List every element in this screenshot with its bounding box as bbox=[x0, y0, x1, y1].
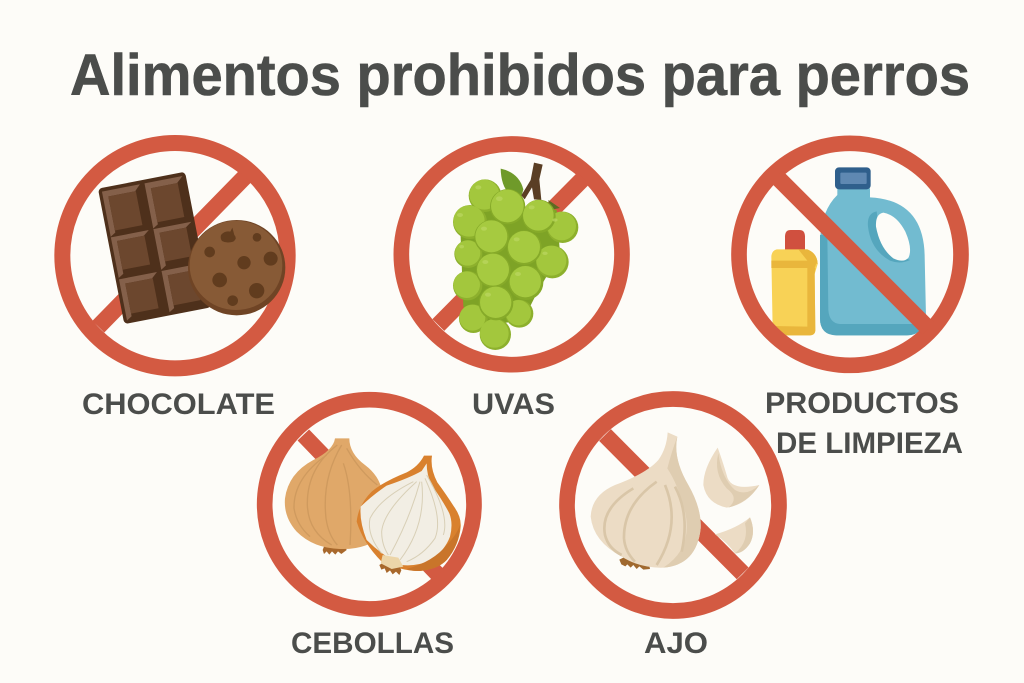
label: ajo: AJO bbox=[644, 627, 708, 660]
icon: grape leaf and stem bbox=[501, 163, 560, 210]
prohibition sign: productos de limpieza bbox=[739, 143, 961, 365]
icon: blue jug bbox=[820, 167, 926, 335]
panel: uvas bbox=[401, 144, 622, 365]
icon: cookie bbox=[188, 220, 285, 315]
prohibition sign: uvas bbox=[401, 144, 622, 365]
title: Alimentos prohibidos para perros bbox=[70, 43, 970, 108]
icon: garlic clove large bbox=[703, 448, 759, 508]
panel: ajo bbox=[567, 399, 779, 611]
prohibition sign: cebollas bbox=[265, 400, 474, 609]
icon: yellow bottle bbox=[771, 230, 818, 335]
panel: productos de limpieza bbox=[739, 143, 961, 365]
prohibition sign: ajo bbox=[567, 399, 779, 611]
icon: grape bunch bbox=[453, 179, 578, 350]
label: productos de limpieza: DE LIMPIEZA bbox=[776, 427, 963, 460]
label: uvas: UVAS bbox=[472, 388, 555, 421]
icon: whole onion bbox=[285, 438, 383, 555]
panel: chocolate bbox=[62, 143, 288, 368]
label: productos de limpieza bbox=[765, 387, 963, 460]
icon: garlic clove small bbox=[715, 517, 753, 553]
panel: cebollas bbox=[265, 400, 474, 609]
label: productos de limpieza: PRODUCTOS bbox=[765, 387, 959, 420]
label: cebollas: CEBOLLAS bbox=[291, 627, 454, 660]
icon: cut onion bbox=[357, 456, 461, 575]
icon: chocolate bar bbox=[98, 172, 211, 324]
label: chocolate: CHOCOLATE bbox=[82, 388, 275, 421]
icon: garlic bulb bbox=[591, 432, 701, 570]
prohibition sign: chocolate bbox=[62, 143, 288, 368]
